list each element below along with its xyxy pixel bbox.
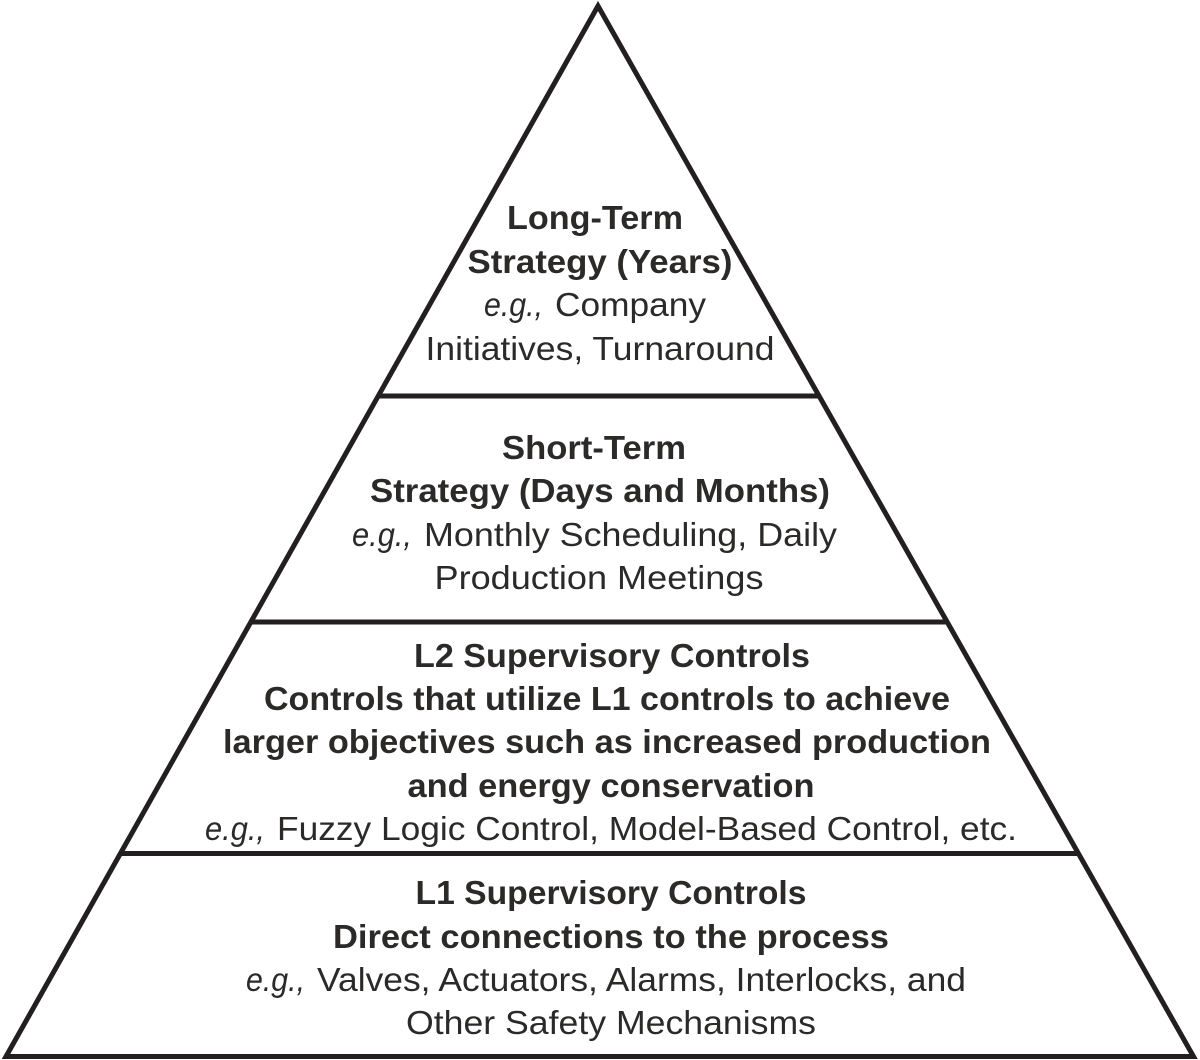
tier: long-term strategy: e.g., [484,286,543,323]
tier: long-term strategy: Long-Term [507,199,683,236]
tier: long-term strategy: Strategy (Years) [468,243,732,280]
tier: L2 supervisory controls [205,637,1017,847]
tier: short-term strategy: Strategy (Days and Months) [370,472,830,509]
tier: long-term strategy [426,199,774,367]
tier: L1 supervisory controls [246,874,966,1041]
tier: short-term strategy: Short-Term [502,429,686,466]
tier: L1 supervisory controls: Direct connections to the process [333,918,889,955]
tier: short-term strategy: e.g., [352,516,412,553]
tier: L2 supervisory controls: Fuzzy Logic Control, Model-Based Control, etc. [277,810,1017,847]
tier: long-term strategy: Company [555,286,707,323]
tier: short-term strategy: Monthly Scheduling, Daily [424,516,838,553]
tier: short-term strategy: Production Meetings [434,559,764,596]
tier: L1 supervisory controls: L1 Supervisory Controls [416,874,806,911]
tier: short-term strategy [352,429,838,596]
tier: L1 supervisory controls: e.g., [246,961,305,998]
tier: L2 supervisory controls: and energy conservation [408,767,814,804]
tier: L1 supervisory controls: Valves, Actuators, Alarms, Interlocks, and [317,961,966,998]
tier: L2 supervisory controls: e.g., [205,810,265,847]
tier: long-term strategy: Initiatives, Turnaround [426,330,774,367]
tier: L2 supervisory controls: L2 Supervisory Controls [414,637,810,674]
tier: L1 supervisory controls: Other Safety Mechanisms [406,1004,816,1041]
tier: L2 supervisory controls: larger objectives such as increased production [223,723,991,760]
tier: L2 supervisory controls: Controls that utilize L1 controls to achieve [264,680,950,717]
